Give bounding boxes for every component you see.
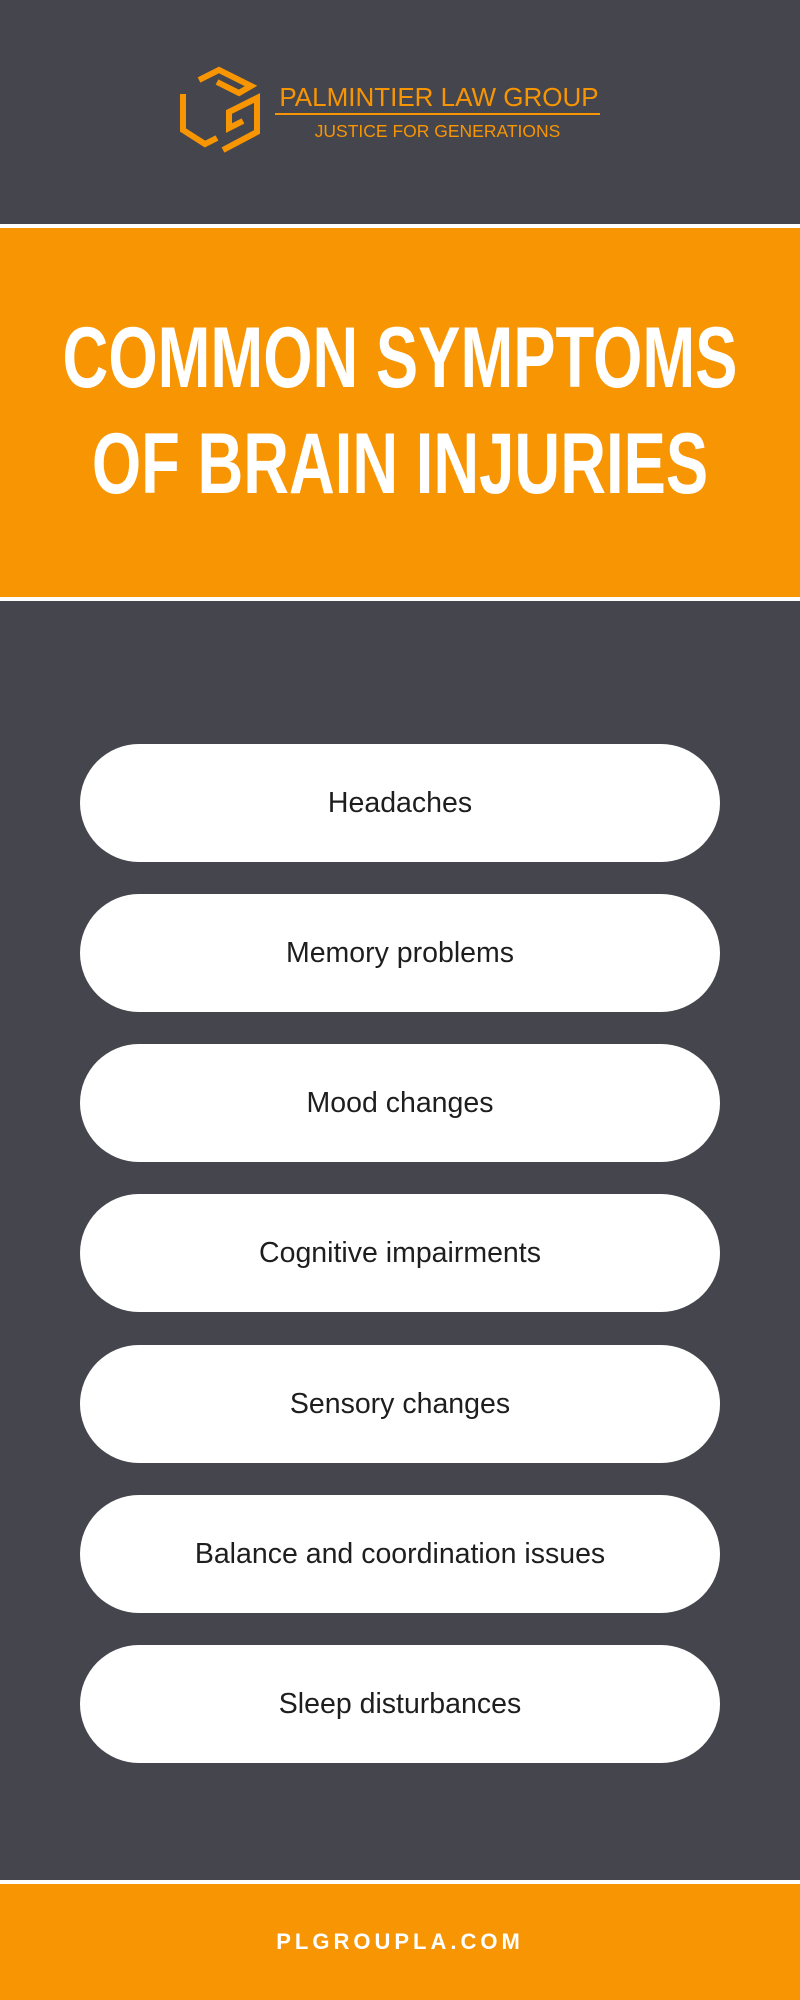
header logo [180, 66, 600, 153]
tagline: JUSTICE FOR GENERATIONS [315, 121, 560, 141]
pill: Mood changes: Mood changes [307, 1086, 493, 1118]
title: OF BRAIN INJURIES [92, 416, 708, 512]
pill: Sensory changes: Sensory changes [290, 1388, 510, 1420]
title: COMMON SYMPTOMS [63, 310, 737, 406]
pill: Headaches: Headaches [328, 786, 472, 818]
footer [0, 1884, 800, 2000]
pill: Mood changes [80, 1044, 720, 1162]
pill: Cognitive impairments: Cognitive impairments [259, 1236, 541, 1268]
pill: Sleep disturbances [80, 1645, 720, 1763]
pill: Headaches [80, 744, 720, 862]
title [63, 310, 737, 512]
title banner [0, 228, 800, 597]
pill: Memory problems: Memory problems [286, 936, 514, 968]
pill: Balance and coordination issues [80, 1495, 720, 1613]
pill: Sensory changes [80, 1345, 720, 1463]
footer url: PLGROUPLA.COM [276, 1929, 524, 1954]
pill: Sleep disturbances: Sleep disturbances [279, 1688, 521, 1720]
firm name: PALMINTIER LAW GROUP [279, 82, 599, 112]
icon: PLG cube [180, 66, 260, 153]
pill: Balance and coordination issues: Balance and coordination issues [195, 1538, 605, 1570]
pill: Memory problems [80, 894, 720, 1012]
pill: Cognitive impairments [80, 1194, 720, 1312]
